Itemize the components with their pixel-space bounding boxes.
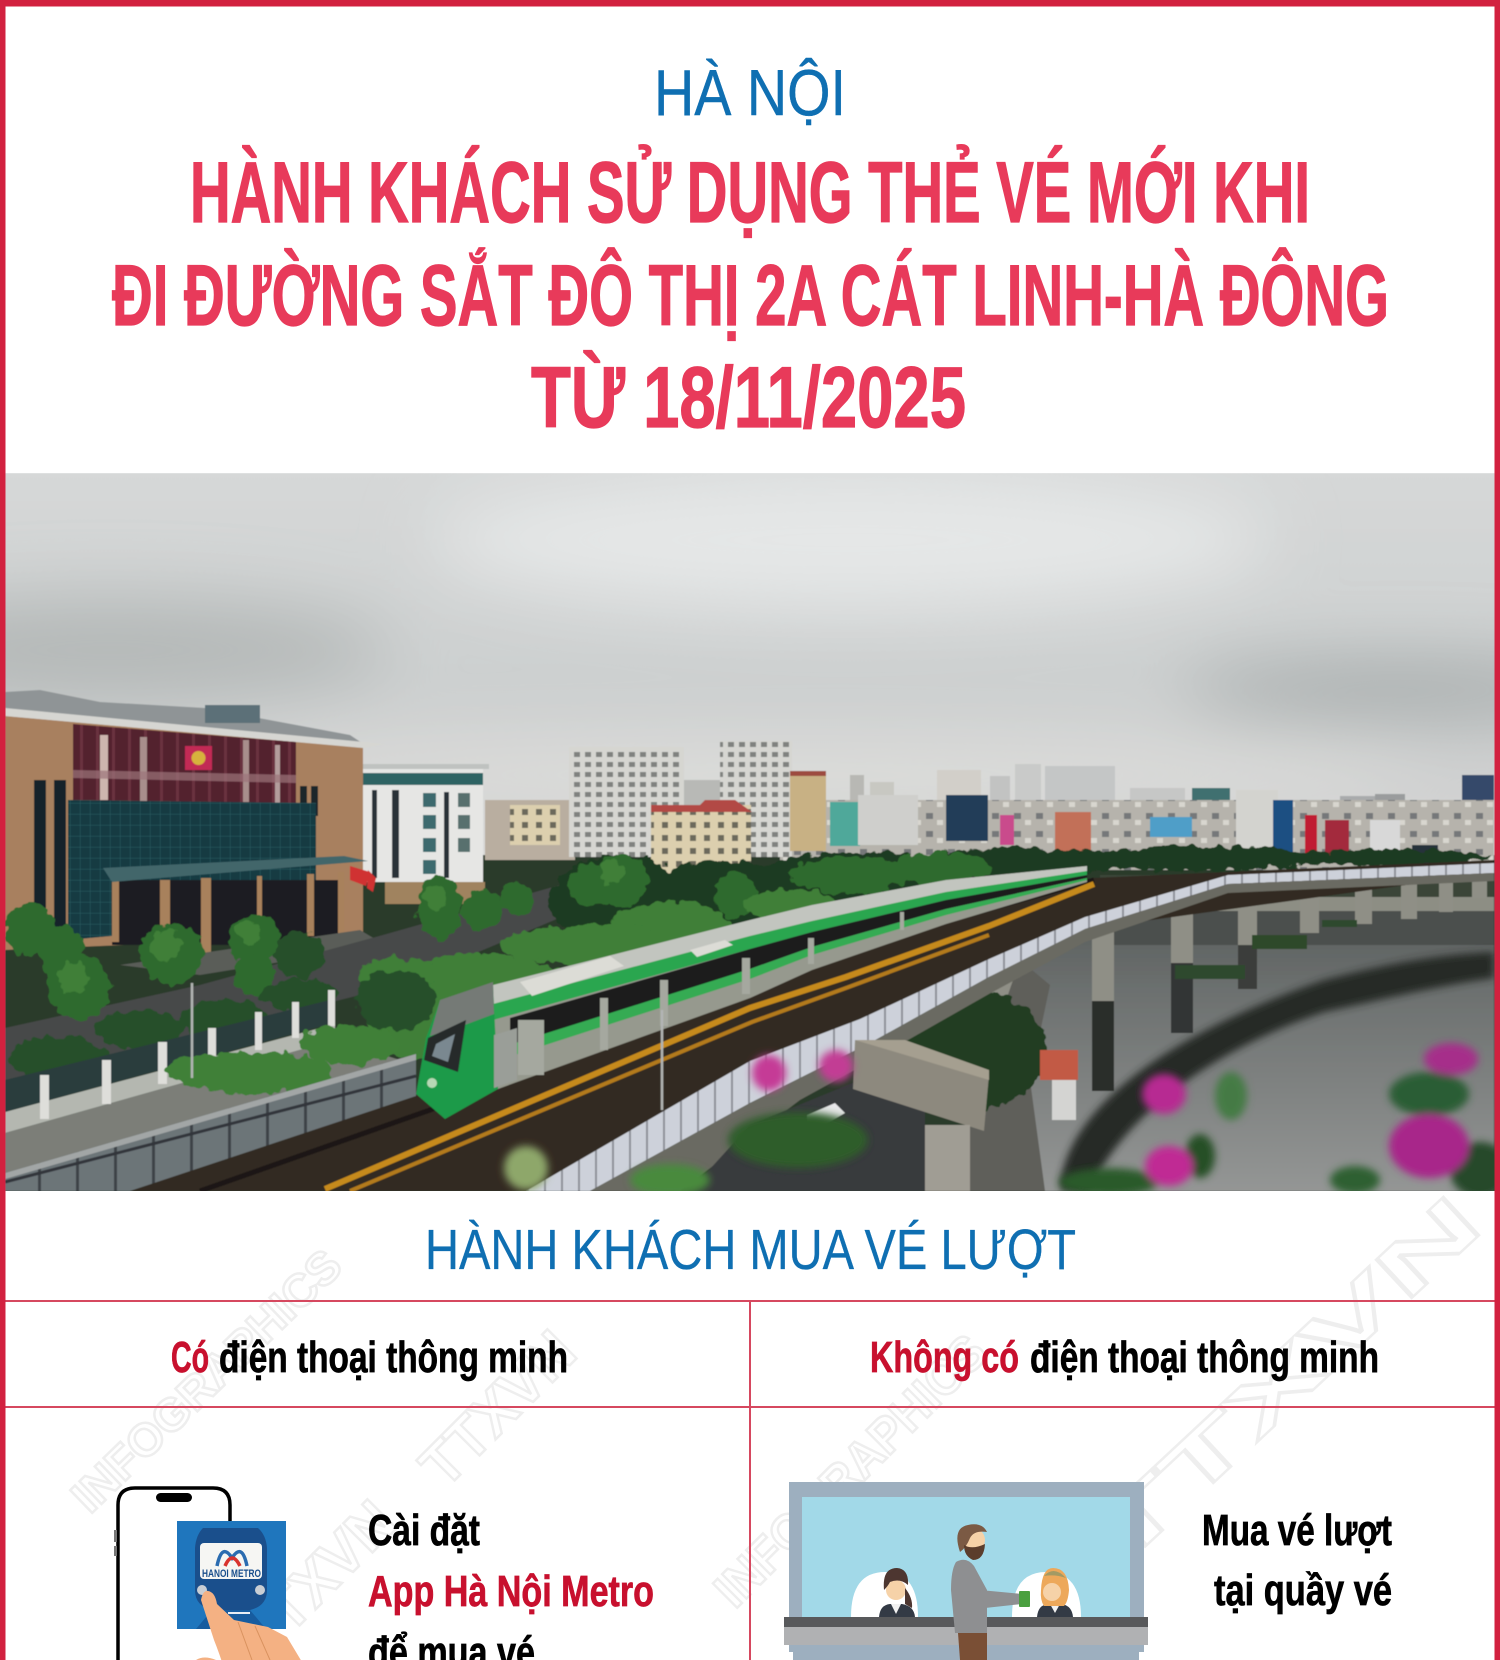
guard wall	[5, 1054, 416, 1191]
text: install app	[368, 1506, 654, 1660]
table rules	[5, 1301, 1495, 1660]
watermarks: INFOGRAPHICS	[61, 1239, 352, 1522]
mid-ground city blocks	[485, 741, 1494, 885]
column heading: without smartphone	[870, 1333, 1379, 1382]
column heading: with smartphone	[171, 1333, 568, 1382]
road under viaduct	[690, 1080, 925, 1191]
column heading: without smartphone: điện thoại thông minh	[1030, 1333, 1379, 1382]
column heading: with smartphone: Có	[171, 1333, 209, 1382]
text: buy at counter: tại quầy vé	[1214, 1566, 1392, 1615]
app icon: HANOI METRO	[202, 1568, 261, 1580]
far skyline	[850, 764, 1494, 801]
text: buy at counter	[1202, 1506, 1392, 1615]
photo: metro train on elevated line	[0, 470, 1500, 1198]
column heading: with smartphone: điện thoại thông minh	[219, 1333, 568, 1382]
watermarks: TTXVN	[407, 1317, 589, 1499]
clerk right	[1012, 1568, 1081, 1617]
trees and garden	[4, 846, 1490, 1084]
emblem	[185, 746, 212, 770]
trackbed	[130, 860, 1494, 1191]
lamp posts	[192, 983, 662, 1110]
white office building	[347, 764, 489, 904]
tree under bridge	[918, 992, 1048, 1112]
text: buy at counter: Mua vé lượt	[1202, 1506, 1392, 1555]
headline line 3: TỪ 18/11/2025	[531, 350, 966, 446]
hand	[201, 1591, 302, 1660]
government building	[5, 690, 385, 975]
illustration: ticket counter	[784, 1482, 1148, 1660]
foreground foliage and bougainvillea	[504, 1043, 1500, 1198]
column heading: without smartphone: Không có	[870, 1333, 1019, 1382]
clerk left	[851, 1568, 918, 1617]
icon: smartphone with Hanoi Metro app	[114, 1488, 302, 1660]
title block	[112, 56, 1389, 446]
rock bank	[970, 970, 1050, 1191]
text: install app: App Hà Nội Metro	[368, 1567, 654, 1616]
watermarks: INFOGRAPHICS	[703, 1324, 997, 1618]
bridge reflection	[1061, 952, 1494, 1191]
white noise barrier	[526, 863, 1494, 1191]
base ground	[5, 855, 1495, 1195]
kicker: Hà Nội: HÀ NỘI	[654, 56, 846, 129]
kiosk	[1040, 1050, 1078, 1120]
bridge piers	[991, 875, 1487, 1091]
far shore	[1100, 875, 1494, 945]
section heading: HÀNH KHÁCH MUA VÉ LƯỢT	[425, 1218, 1076, 1282]
water	[1030, 940, 1494, 1191]
fence and pavement	[5, 990, 416, 1173]
concrete support	[853, 1040, 989, 1191]
watermarks: TTXVN	[1074, 1179, 1497, 1582]
rails	[200, 880, 1094, 1191]
metro train	[416, 866, 1087, 1119]
counter	[793, 1645, 1139, 1660]
sky	[0, 470, 1500, 873]
customer	[951, 1524, 1030, 1660]
watermarks	[61, 1179, 1497, 1660]
text: install app: Cài đặt	[368, 1506, 480, 1555]
app icon	[177, 1521, 286, 1629]
road	[5, 885, 590, 1085]
